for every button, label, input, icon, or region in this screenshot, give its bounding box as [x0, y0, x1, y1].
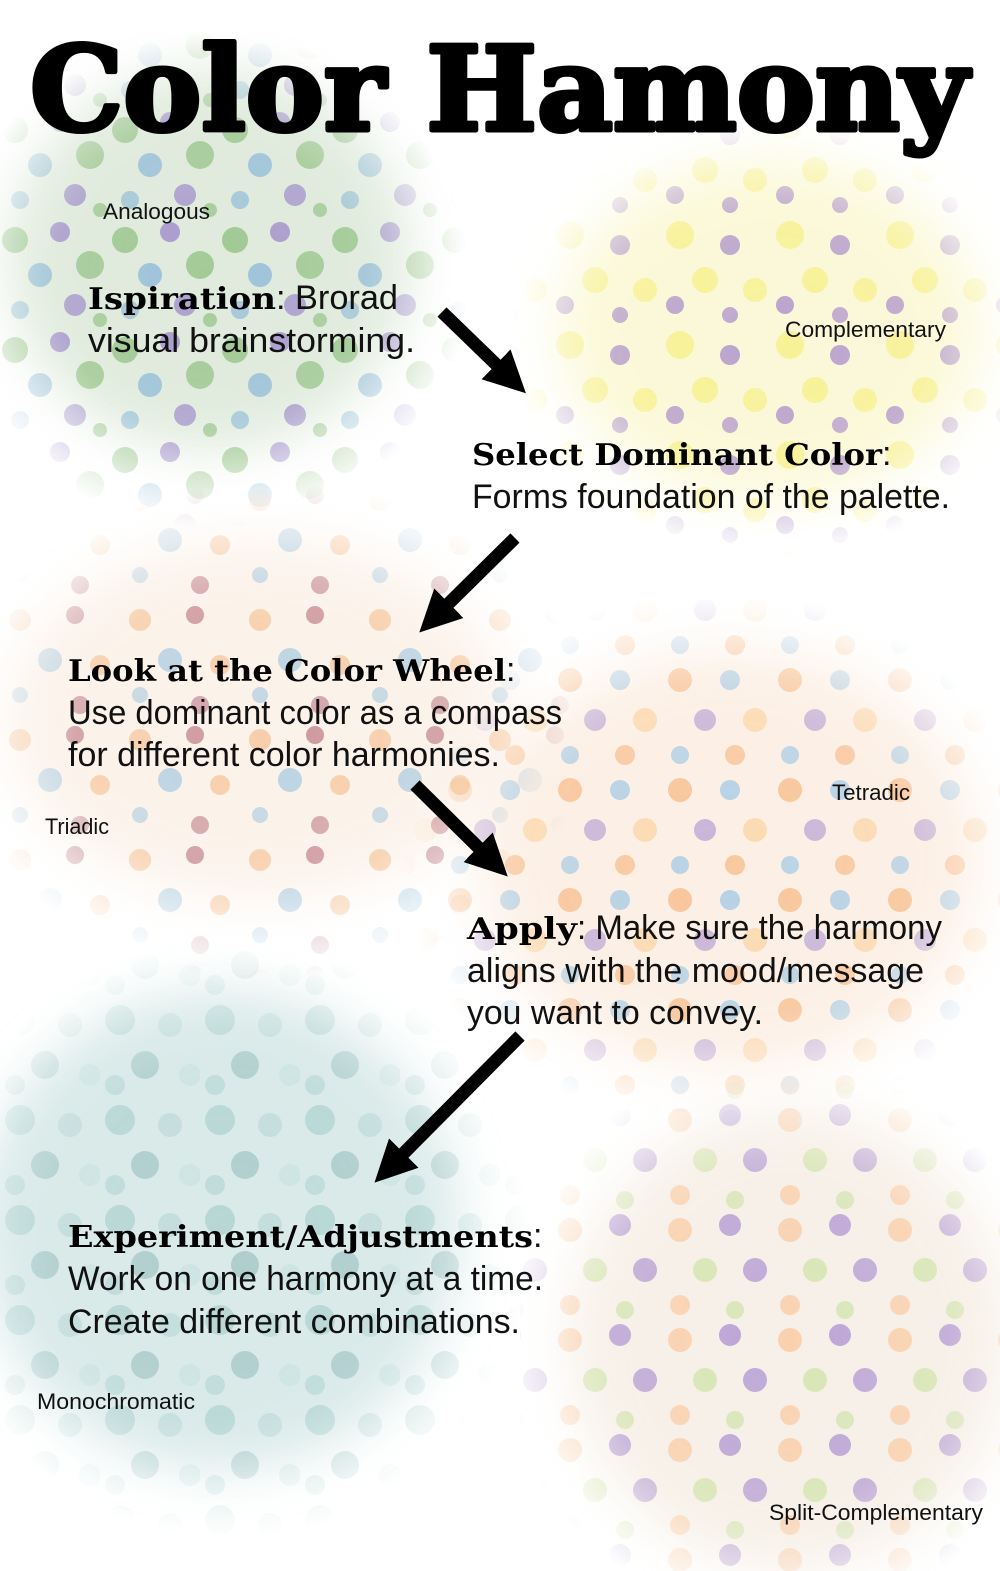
arrow 1: [442, 312, 505, 373]
step: experiment: [68, 1217, 543, 1341]
splatter: split-complementary: [520, 1060, 1000, 1571]
step: color wheel: for different color harmonies.: [68, 736, 500, 774]
step: apply: [466, 909, 942, 1032]
step: apply: Apply : Make sure the harmony: [466, 909, 942, 947]
label: split-complementary: Split-Complementary: [769, 1500, 983, 1525]
step: apply: aligns with the mood/message: [467, 952, 924, 990]
step: inspiration: visual brainstorming.: [88, 322, 415, 360]
step: select dominant color: Select Dominant Color :: [472, 435, 891, 473]
label: tetradic: Tetradic: [832, 780, 910, 805]
arrow 3: [415, 785, 487, 856]
step: experiment: Create different combinations.: [68, 1303, 520, 1341]
splatter: tetradic: [400, 600, 1000, 1140]
step: inspiration: [88, 279, 415, 360]
splatter: monochromatic: [0, 954, 510, 1520]
splatter: analogous: [0, 30, 480, 530]
arrow 4: [395, 1036, 520, 1162]
step: select dominant color: [472, 435, 950, 516]
step: color wheel: [68, 651, 562, 774]
label: monochromatic: Monochromatic: [37, 1389, 195, 1414]
splatter: complementary: [500, 120, 1000, 560]
step: select dominant color: Forms foundation of the palette.: [472, 478, 950, 516]
step: inspiration: Ispiration : Brorad: [88, 279, 398, 317]
step: experiment: Work on one harmony at a time.: [68, 1260, 543, 1298]
label: triadic: Triadic: [45, 814, 109, 839]
step: experiment: Experiment/Adjustments :: [68, 1217, 542, 1255]
label: complementary: Complementary: [785, 317, 946, 342]
label: analogous: Analogous: [103, 199, 210, 224]
step: apply: you want to convey.: [467, 994, 763, 1032]
step: color wheel: Look at the Color Wheel :: [68, 651, 515, 689]
title: Color Hamony: [30, 22, 972, 158]
step: color wheel: Use dominant color as a compass: [68, 694, 562, 732]
arrow 2: [440, 538, 515, 612]
splatter: triadic: [6, 492, 569, 968]
